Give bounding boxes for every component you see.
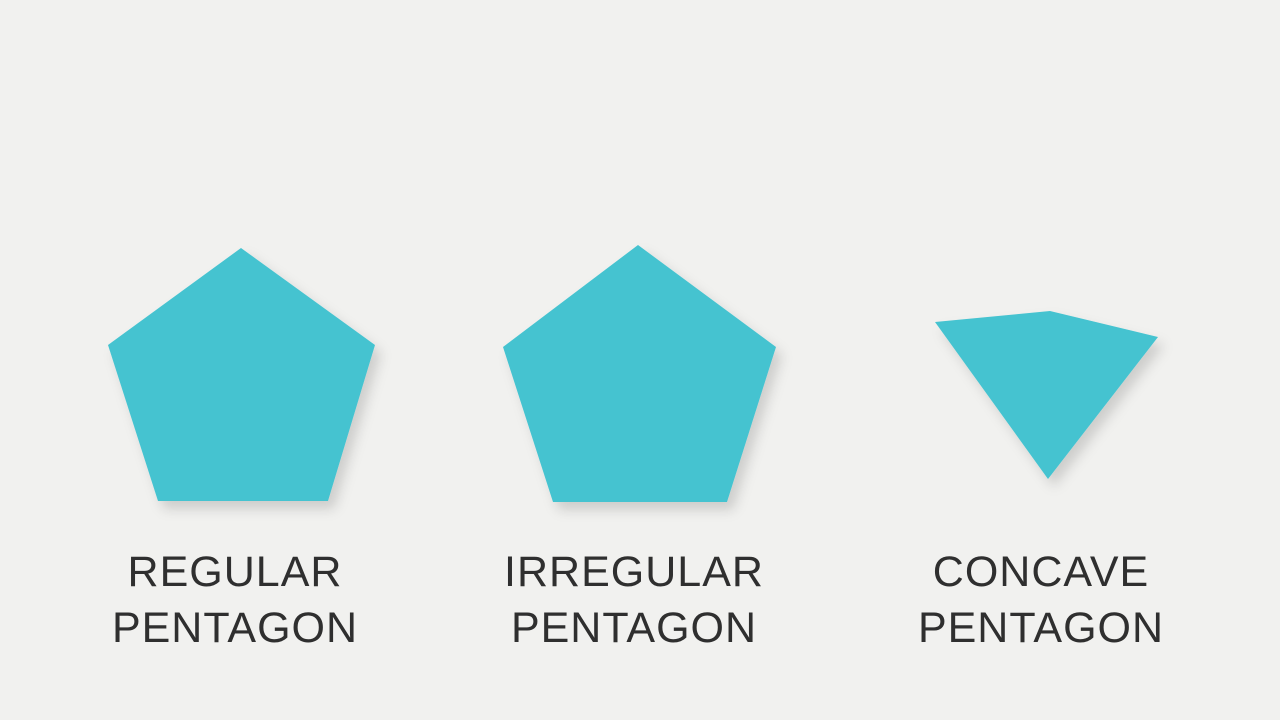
label: regular pentagon: PENTAGON — [112, 604, 358, 652]
shape: irregular pentagon — [503, 245, 776, 502]
label: concave pentagon — [918, 548, 1164, 652]
shape: regular pentagon — [108, 248, 375, 501]
label: irregular pentagon: IRREGULAR — [504, 548, 764, 596]
label: irregular pentagon: PENTAGON — [511, 604, 757, 652]
label: concave pentagon: PENTAGON — [918, 604, 1164, 652]
label: concave pentagon: CONCAVE — [933, 548, 1149, 596]
label: regular pentagon — [112, 548, 358, 652]
label: regular pentagon: REGULAR — [128, 548, 342, 596]
shape: concave pentagon — [935, 311, 1158, 479]
label: irregular pentagon — [504, 548, 764, 652]
